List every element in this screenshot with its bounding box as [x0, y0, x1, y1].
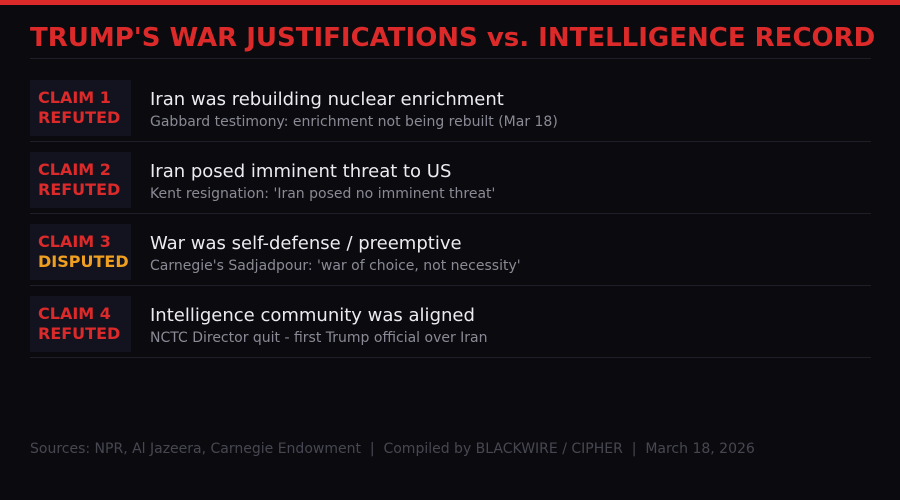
badge: claim 2 refuted: CLAIM 2: [38, 160, 111, 179]
row: claim 1: [30, 70, 871, 142]
claim 1 evidence: Gabbard testimony: enrichment not being rebuilt (Mar 18): [150, 114, 558, 130]
claim 4 text: Intelligence community was aligned: [150, 305, 475, 326]
badge: claim 3 disputed: [30, 224, 131, 280]
claim 2 evidence: Kent resignation: 'Iran posed no imminent threat': [150, 186, 495, 202]
claim 4 evidence: NCTC Director quit - first Trump official over Iran: [150, 330, 488, 346]
row: claim 4: [30, 286, 871, 358]
footer sources: Sources: NPR, Al Jazeera, Carnegie Endowment | Compiled by BLACKWIRE / CIPHER | March 18, 2026: [30, 441, 755, 457]
claim 3 evidence: Carnegie's Sadjadpour: 'war of choice, not necessity': [150, 258, 521, 274]
claim 3 text: War was self-defense / preemptive: [150, 233, 462, 254]
row: claim 2: [30, 142, 871, 214]
badge: claim 4 refuted: [30, 296, 131, 352]
badge: claim 2 refuted: REFUTED: [38, 180, 120, 199]
claim 2 text: Iran posed imminent threat to US: [150, 161, 451, 182]
row: claim 3: [30, 214, 871, 286]
badge: claim 2 refuted: [30, 152, 131, 208]
badge: claim 1 refuted: CLAIM 1: [38, 88, 111, 107]
badge: claim 3 disputed: DISPUTED: [38, 252, 129, 271]
top red bar: [0, 0, 900, 5]
badge: claim 1 refuted: REFUTED: [38, 108, 120, 127]
badge: claim 4 refuted: REFUTED: [38, 324, 120, 343]
claim 1 text: Iran was rebuilding nuclear enrichment: [150, 89, 504, 110]
badge: claim 3 disputed: CLAIM 3: [38, 232, 111, 251]
title: TRUMP'S WAR JUSTIFICATIONS vs. INTELLIGENCE RECORD: [30, 23, 875, 53]
badge: claim 4 refuted: CLAIM 4: [38, 304, 111, 323]
badge: claim 1 refuted: [30, 80, 131, 136]
